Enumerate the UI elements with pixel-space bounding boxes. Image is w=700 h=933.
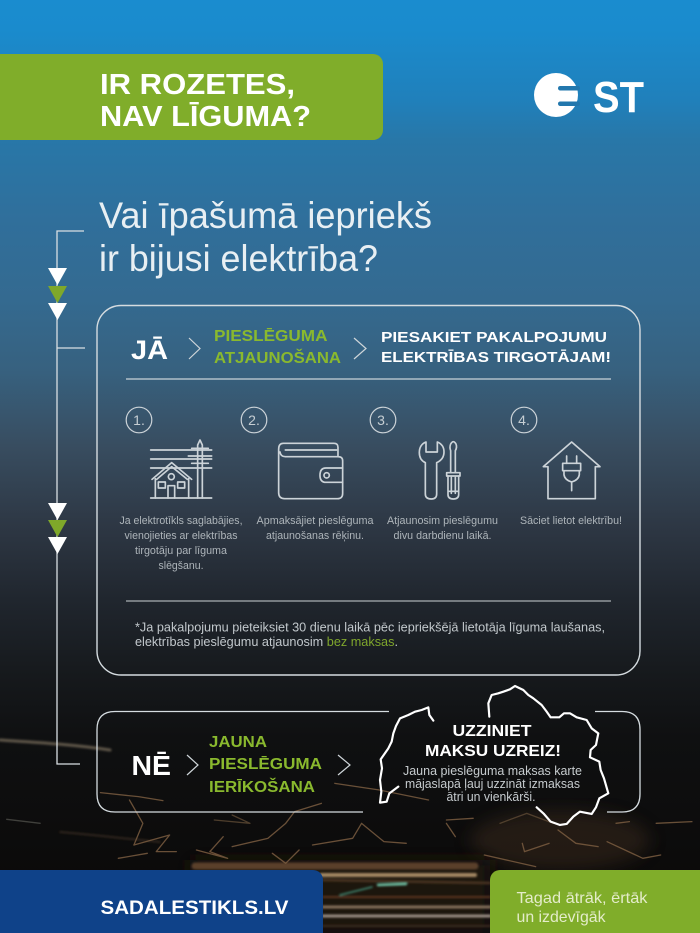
step 2 number [241,407,267,433]
caption 1: vienojieties ar elektrības [124,530,238,542]
caption 3: divu darbdienu laikā. [394,530,492,542]
panel: NĒ [97,686,640,825]
map text: ātri un vienkārši. [446,790,536,804]
caption 4: Sāciet lietot elektrību! [520,515,622,527]
caption 1: Ja elektrotīkls saglabājies, [120,515,242,527]
question heading: Vai īpašumā iepriekš [99,195,432,236]
icon: wrench and screwdriver [419,442,460,499]
JĀ label: JĀ [131,335,168,365]
chevron [187,755,198,775]
footer: website: SADALESTIKLS.LV [100,898,289,919]
caption 1: slēgšanu. [158,560,204,572]
chevron [189,338,200,359]
banner title: NAV LĪGUMA? [100,101,311,133]
panel: JĀ [97,306,640,675]
logo: ST [593,73,644,122]
renewal label: ATJAUNOŠANA [214,349,341,367]
step 3 number: 3. [377,412,389,428]
chevron [338,755,350,775]
icon: house with plug [543,442,600,499]
footer: slogan: un izdevīgāk [516,909,606,926]
map text: Jauna pieslēguma maksas karte [403,764,582,778]
header banner [0,54,383,140]
footer: slogan [490,870,700,933]
NĒ label: NĒ [132,750,171,781]
call to action: ELEKTRĪBAS TIRGOTĀJAM! [381,349,611,366]
arrows: upper [48,268,67,320]
new connection label: IERĪKOŠANA [209,778,315,796]
new connection label: JAUNA [209,734,267,751]
caption 2: atjaunošanas rēķinu. [266,530,364,542]
step 4 number: 4. [518,412,530,428]
icon: wallet [279,443,343,499]
step 3 number [370,407,396,433]
step captions [120,515,622,572]
chevron [354,338,366,359]
footnote: *Ja pakalpojumu pieteiksiet 30 dienu laikā pēc iepriekšējā lietotāja līguma laušanas, [135,620,605,634]
step 2 number: 2. [248,412,260,428]
icon: house and power line [151,440,212,498]
step 4 number [511,407,537,433]
flow line with arrows [48,231,85,764]
step 1 number [126,407,152,433]
map heading: MAKSU UZREIZ! [425,743,561,760]
call to action: PIESAKIET PAKALPOJUMU [381,329,607,346]
question heading: ir bijusi elektrība? [99,238,378,279]
footer: slogan: Tagad ātrāk, ērtāk [516,890,649,907]
map of Latvia outline [380,686,608,825]
footer: website [0,870,323,933]
banner title: IR ROZETES, [100,69,295,101]
arrows: lower [48,503,67,554]
logo [534,73,644,122]
background light trails [0,740,692,933]
new connection label: PIESLĒGUMA [209,756,322,773]
map text: mājaslapā ļauj uzzināt izmaksas [405,777,580,791]
caption 2: Apmaksājiet pieslēguma [256,515,374,527]
map heading: UZZINIET [452,723,532,740]
caption 3: Atjaunosim pieslēgumu [387,515,498,527]
renewal label: PIESLĒGUMA [214,328,328,345]
footnote: elektrības pieslēgumu atjaunosim bez maksas. [135,635,398,649]
step 1 number: 1. [133,412,145,428]
caption 1: tirgotāju par līguma [135,545,228,557]
